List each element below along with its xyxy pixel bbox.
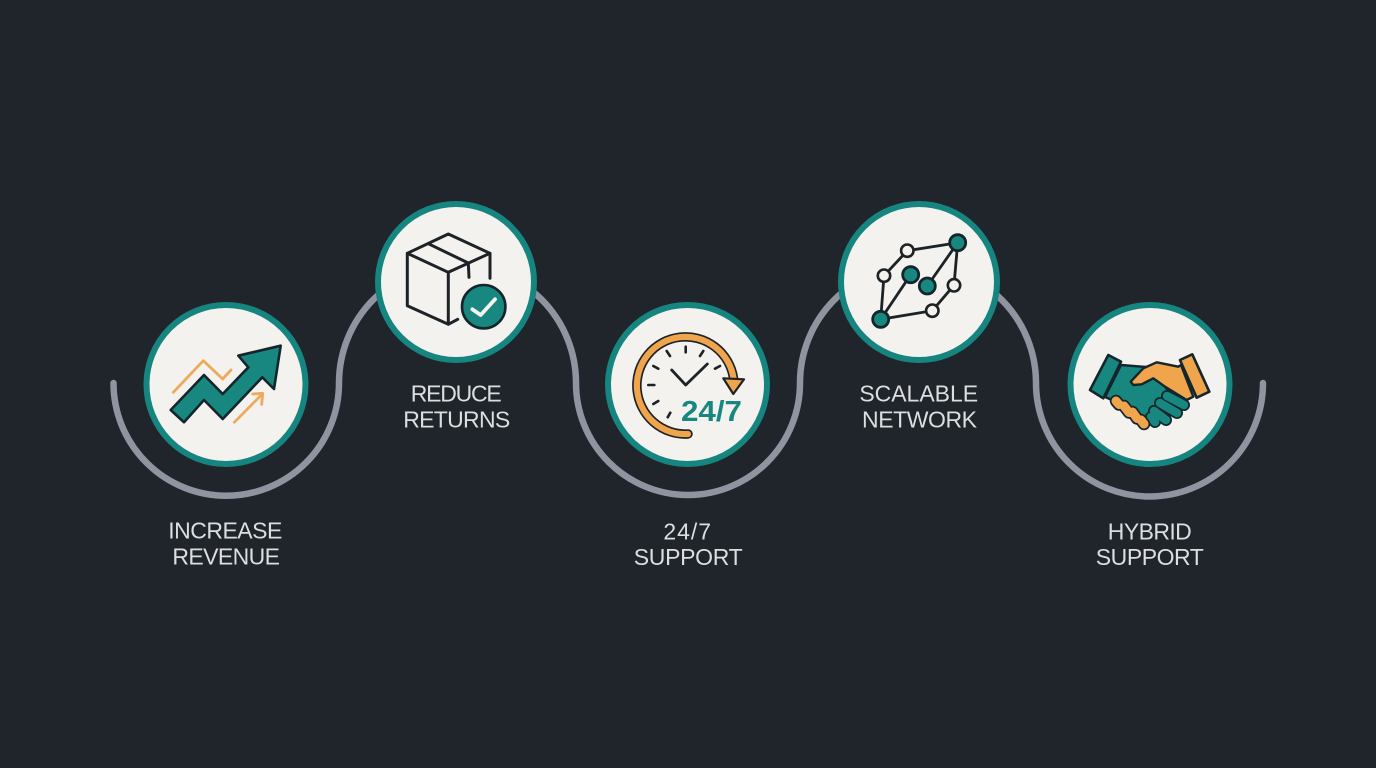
label: reduce returns: REDUCE	[411, 381, 502, 407]
wavy connector path	[114, 264, 1263, 496]
icon: handshake	[1090, 354, 1209, 424]
icon: clock with 24/7	[637, 337, 744, 434]
step 1: increase revenue	[146, 305, 306, 570]
icon: box with check	[407, 234, 505, 328]
label: 24/7 support: 24/7	[663, 518, 711, 544]
step 4: scalable network	[841, 204, 997, 432]
circle badge 4	[841, 204, 997, 360]
step 2: reduce returns	[378, 204, 534, 433]
label: hybrid support: HYBRID	[1108, 518, 1192, 544]
circle badge 5	[1070, 305, 1230, 464]
label: hybrid support: SUPPORT	[1096, 544, 1204, 570]
label: scalable network: NETWORK	[862, 406, 978, 432]
icon: rising arrow	[171, 346, 281, 422]
clock text: 24/7	[681, 396, 742, 428]
step 5: hybrid support	[1070, 305, 1230, 570]
label: increase revenue: REVENUE	[172, 544, 280, 570]
label: reduce returns: RETURNS	[403, 407, 510, 433]
icon: network nodes	[873, 235, 966, 327]
circle badge 1	[146, 305, 306, 464]
label: 24/7 support: SUPPORT	[634, 544, 743, 570]
label: scalable network: SCALABLE	[859, 381, 978, 407]
label: increase revenue: INCREASE	[168, 517, 282, 543]
step 3: 24/7 support	[608, 305, 767, 570]
circle badge 3	[608, 305, 767, 464]
circle badge 2	[378, 204, 534, 360]
